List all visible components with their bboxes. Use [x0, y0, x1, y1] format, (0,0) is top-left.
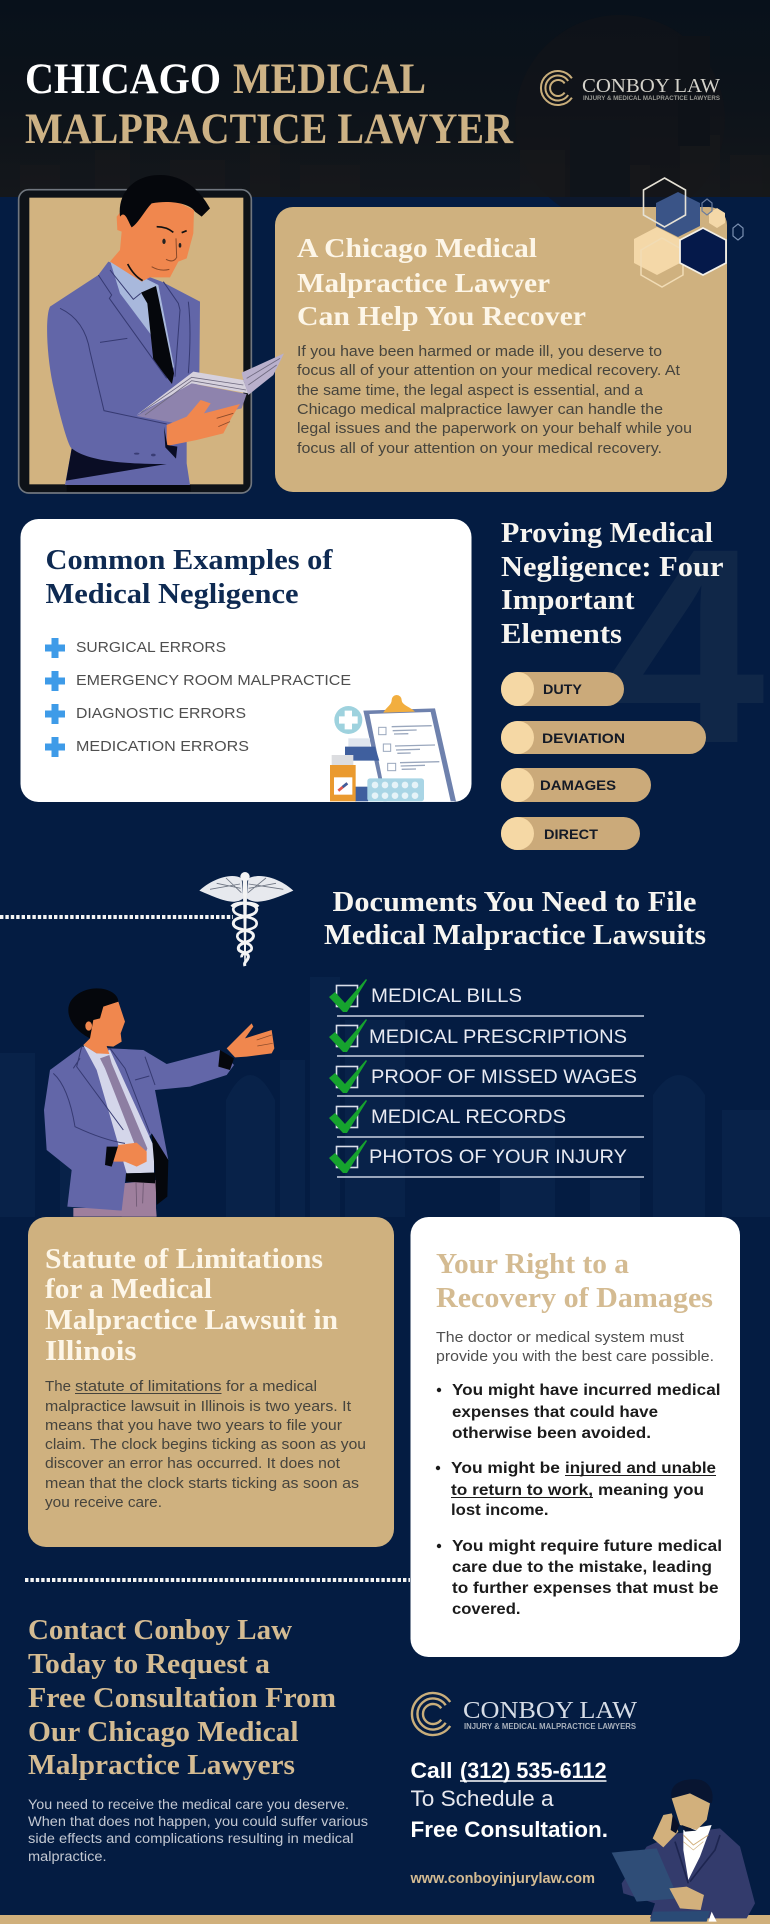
bullet: unable to work: meaning you: [598, 1482, 704, 1499]
heading: [297, 233, 586, 331]
heading: Malpractice Lawyer: [297, 268, 550, 298]
heading: documents: Documents You Need to File: [332, 887, 696, 918]
logo: header: INJURY & MEDICAL MALPRACTICE LAWYERS: [583, 95, 721, 102]
bullet: medical expenses: You might have incurred medical: [452, 1382, 720, 1399]
item: medical records: [329, 1100, 566, 1133]
text block: [45, 1379, 366, 1511]
item: photos of your injury: [329, 1140, 627, 1173]
footer band: [0, 1915, 770, 1924]
bullet: unable to work: [436, 1460, 716, 1519]
main title: MALPRACTICE LAWYER: [25, 106, 514, 153]
bullet: future care: covered.: [452, 1601, 520, 1618]
bullet: future care: care due to the mistake, leading: [452, 1559, 712, 1576]
panel: your right to a recovery of damages: [410, 1217, 740, 1657]
logo: header: [541, 71, 721, 105]
logo: footer: [412, 1693, 637, 1735]
text block: claim. The clock begins ticking as soon as you: [45, 1437, 366, 1453]
text block: malpractice lawsuit in Illinois is two years. It: [45, 1399, 351, 1415]
icon: clipboard and medicine: [330, 695, 456, 801]
pill: duty: [501, 672, 624, 706]
text block: the same time, the legal aspect is essential, and a: [297, 383, 644, 399]
illustration: man presenting: [44, 988, 274, 1217]
bullet: future care: You might require future medical: [452, 1538, 722, 1555]
heading: contact conboy law: Malpractice Lawyers: [28, 1750, 295, 1781]
heading: A Chicago Medical: [297, 233, 538, 263]
text block: focus all of your attention on your medical recovery. At: [297, 363, 680, 379]
main title: CHICAGO: [25, 56, 221, 103]
checklist: documents: [329, 979, 644, 1177]
pill: direct: DIRECT: [544, 826, 598, 842]
call to action: (312) 535-6112: [460, 1758, 606, 1783]
icon: caduceus: [199, 872, 293, 966]
heading: contact conboy law: Our Chicago Medical: [28, 1717, 299, 1748]
bullet: unable to work: to return to work,: [451, 1482, 593, 1499]
heading: proving medical negligence: Negligence: Four: [501, 552, 724, 583]
item: proof of missed wages: PROOF OF MISSED WAGES: [371, 1067, 637, 1088]
item: medical bills: MEDICAL BILLS: [371, 986, 522, 1007]
heading: for a Medical: [45, 1274, 212, 1305]
heading: contact conboy law: [28, 1615, 336, 1781]
heading: Common Examples of: [46, 545, 333, 576]
pill: direct: [501, 817, 640, 850]
text block: contact: side effects and complications resulting in medical: [28, 1831, 354, 1846]
heading: Illinois: [45, 1336, 137, 1367]
list: negligence examples: [45, 638, 351, 757]
logo: header: CONBOY LAW: [582, 75, 720, 97]
heading: contact conboy law: Free Consultation From: [28, 1683, 336, 1714]
heading: documents: Medical Malpractice Lawsuits: [324, 920, 706, 951]
heading: contact conboy law: Today to Request a: [28, 1649, 270, 1680]
text block: you receive care.: [45, 1495, 162, 1511]
bullet: unable to work: You might be: [451, 1460, 560, 1477]
logo: footer: CONBOY LAW: [463, 1698, 637, 1724]
large faint number 4: 4: [607, 490, 767, 801]
pill: damages: [501, 768, 651, 802]
background skyline: [0, 977, 770, 1217]
pill: damages: DAMAGES: [540, 777, 616, 793]
call to action: Free Consultation.: [410, 1817, 608, 1842]
item: medical prescriptions: [329, 1019, 627, 1052]
heading: [436, 1249, 713, 1314]
bullet: future care: [437, 1538, 722, 1618]
text block: means that you have two years to file your: [45, 1418, 342, 1434]
heading: proving medical negligence: Important: [501, 585, 635, 616]
text block: for a medical: [226, 1379, 317, 1395]
call to action: To Schedule a: [410, 1786, 554, 1811]
heading: proving medical negligence: [501, 518, 724, 650]
text block: focus all of your attention on your medical recovery.: [297, 441, 662, 457]
heading: contact conboy law: Contact Conboy Law: [28, 1615, 293, 1646]
pill: duty: DUTY: [543, 681, 583, 697]
panel: statute of limitations: [28, 1217, 394, 1547]
main title: [25, 56, 514, 153]
illustration: man on the phone: [612, 1779, 755, 1922]
main title: MEDICAL: [233, 56, 426, 103]
heading: Statute of Limitations: [45, 1244, 323, 1275]
text block: statute of limitations: [75, 1379, 222, 1395]
bullet: medical expenses: expenses that could have: [452, 1404, 658, 1421]
bullet: unable to work: lost income.: [451, 1502, 548, 1519]
heading: Medical Negligence: [46, 579, 298, 610]
list: negligence examples: EMERGENCY ROOM MALPRACTICE: [76, 672, 351, 689]
heading: Your Right to a: [436, 1249, 629, 1280]
item: proof of missed wages: [329, 1060, 637, 1093]
pill: deviation: DEVIATION: [542, 730, 625, 746]
list: negligence examples: SURGICAL ERRORS: [76, 639, 226, 656]
heading: documents: [324, 887, 706, 951]
text block: contact: You need to receive the medical care you deserve.: [28, 1797, 349, 1812]
panel: a lawyer can help you recover: [275, 178, 743, 492]
pill: deviation: [501, 721, 706, 754]
text block: contact: [28, 1797, 368, 1864]
item: medical bills: [329, 979, 522, 1012]
pills: four elements: [501, 672, 706, 850]
item: medical records: MEDICAL RECORDS: [371, 1107, 566, 1128]
text block: contact: When that does not happen, you could suffer various: [28, 1814, 368, 1829]
heading: Can Help You Recover: [297, 301, 586, 331]
text block: [436, 1330, 714, 1365]
heading: [45, 1244, 338, 1367]
text block: legal issues and the paperwork on your behalf while you: [297, 421, 692, 437]
heading: Recovery of Damages: [436, 1283, 713, 1314]
text block: contact: malpractice.: [28, 1849, 106, 1864]
text block: discover an error has occurred. It does not: [45, 1456, 340, 1472]
call to action: [410, 1758, 608, 1842]
logo: footer: INJURY & MEDICAL MALPRACTICE LAWYERS: [464, 1722, 637, 1731]
text block: The doctor or medical system must: [436, 1330, 684, 1346]
website: www.conboyinjurylaw.com: [410, 1871, 595, 1887]
list: negligence examples: DIAGNOSTIC ERRORS: [76, 705, 246, 722]
item: medical prescriptions: MEDICAL PRESCRIPTIONS: [369, 1027, 627, 1048]
heading: [46, 545, 333, 610]
bullet: medical expenses: [437, 1382, 720, 1442]
icon: hexagon cluster: [634, 178, 743, 287]
header banner: [0, 0, 770, 225]
text block: mean that the clock starts ticking as soon as: [45, 1476, 359, 1492]
text block: The: [45, 1379, 71, 1395]
item: photos of your injury: PHOTOS OF YOUR INJURY: [369, 1147, 627, 1168]
call to action: Call: [410, 1758, 452, 1783]
heading: proving medical negligence: Proving Medical: [501, 518, 713, 549]
heading: Malpractice Lawsuit in: [45, 1305, 338, 1336]
text block: Chicago medical malpractice lawyer can handle the: [297, 402, 663, 418]
panel: common examples of medical negligence: [20, 519, 472, 802]
heading: proving medical negligence: Elements: [501, 619, 622, 650]
list: negligence examples: MEDICATION ERRORS: [76, 738, 249, 755]
illustration: tablet with man reading a book: [19, 175, 284, 493]
text block: [297, 344, 692, 457]
bullet: unable to work: injured and unable: [565, 1460, 716, 1477]
bullet: medical expenses: otherwise been avoided.: [452, 1425, 651, 1442]
text block: If you have been harmed or made ill, you deserve to: [297, 344, 662, 360]
text block: provide you with the best care possible.: [436, 1349, 714, 1365]
bullet: future care: to further expenses that must be: [452, 1580, 719, 1597]
